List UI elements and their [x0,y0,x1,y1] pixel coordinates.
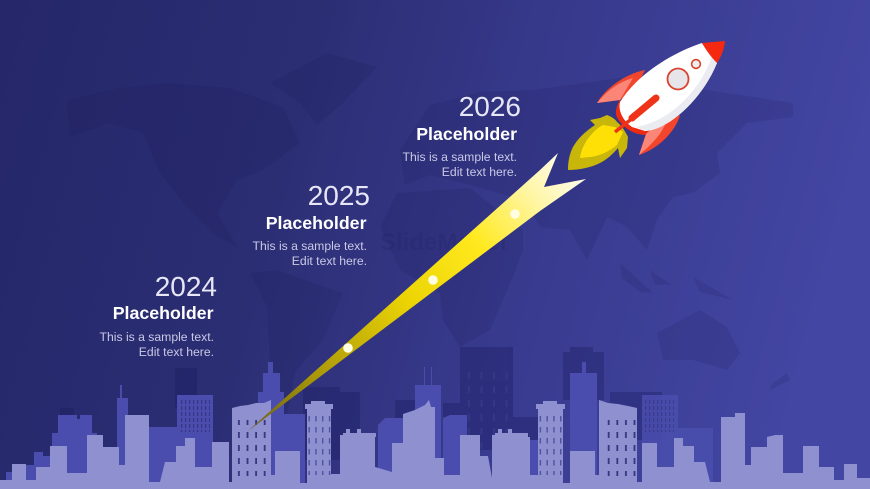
milestone 2026 [403,91,521,179]
milestone 2025: This is a sample text. [253,239,367,253]
nose [702,41,725,63]
right fin [639,115,680,155]
map: North America [67,83,300,247]
timeline dots [343,209,520,353]
left fin [597,70,645,103]
map: Europe and Asia [400,78,793,260]
dark back skyline [60,347,662,460]
map: New Zealand [770,373,790,390]
milestone 2025: Edit text here. [292,254,367,268]
front skyline [0,400,870,489]
milestone 2026: 2026 [459,91,521,122]
map: Indonesia [620,263,733,300]
fuselage stripe [632,98,656,118]
map: Greenland [270,53,377,125]
large porthole [668,68,688,90]
flame [568,115,628,170]
milestone 2025: 2025 [308,180,370,211]
milestone 2024: 2024 [155,271,217,302]
milestone 2025 [253,180,370,268]
rocket exhaust beam [248,153,586,431]
building windows [236,415,636,476]
small porthole [692,60,700,68]
milestone 2026: Placeholder [416,124,517,144]
middle skyline [6,362,713,489]
milestone 2025: Placeholder [266,213,367,233]
milestone 2024: This is a sample text. [100,330,214,344]
watermark: SlideModel [380,229,507,256]
dark tower windows [465,372,515,452]
map: Africa [380,188,523,347]
milestone 2026: Edit text here. [442,165,517,179]
middle tower windows [180,400,674,432]
world map silhouette [67,53,793,425]
milestone 2024 [100,271,217,359]
body [620,43,717,131]
milestone 2026: This is a sample text. [403,150,517,164]
red band [616,100,652,135]
icon: rocket [568,41,725,170]
milestone 2024: Placeholder [113,303,214,323]
map: South America [250,270,343,425]
milestone 2024: Edit text here. [139,345,214,359]
map: Australia [657,310,740,370]
